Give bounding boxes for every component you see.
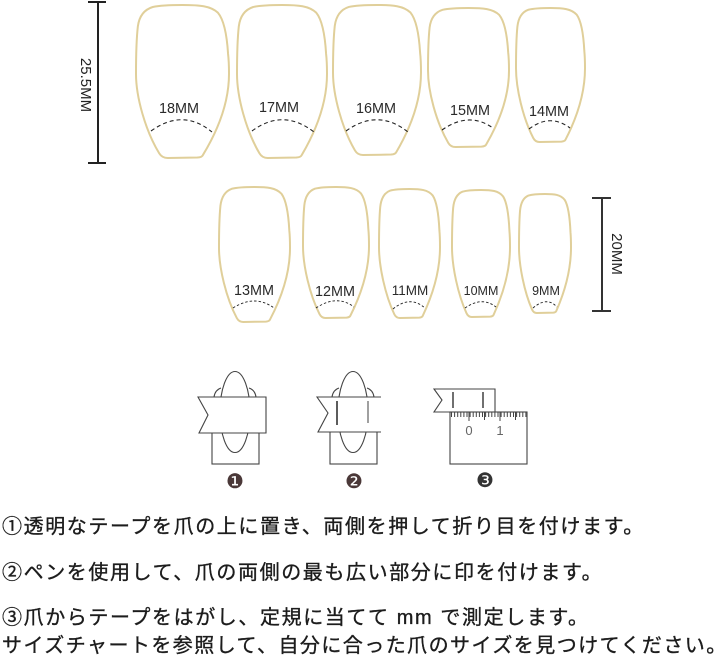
instruction: size chart note: サイズチャートを参照して、自分に合った爪のサイズを見つけてください。 bbox=[2, 634, 720, 657]
nail: 18MM bbox=[136, 5, 229, 158]
instruction: step 1: ①透明なテープを爪の上に置き、両側を押して折り目を付けます。 bbox=[2, 515, 645, 538]
diagram: step 2 mark nail width bbox=[317, 372, 381, 493]
nail: 13MM: 13MM bbox=[234, 283, 274, 299]
nail: 18MM: 18MM bbox=[159, 101, 199, 117]
bracket: 20MM length: 20MM bbox=[608, 233, 625, 275]
nail: 9MM: 9MM bbox=[532, 284, 560, 298]
nail: 15MM: 15MM bbox=[450, 103, 490, 119]
bracket: 20MM length bbox=[592, 198, 625, 311]
instruction: step 2: ②ペンを使用して、爪の両側の最も広い部分に印を付けます。 bbox=[2, 561, 603, 584]
diagram: step 1 tape over nail bbox=[198, 372, 266, 493]
nail: 9MM bbox=[519, 194, 571, 313]
nail: 16MM: 16MM bbox=[356, 101, 396, 117]
nail: 13MM bbox=[219, 187, 290, 322]
nail: 11MM: 11MM bbox=[392, 283, 428, 298]
diagram: step 3 measure with ruler: 0 bbox=[465, 423, 473, 438]
nail: 10MM bbox=[452, 190, 510, 317]
nail: 15MM bbox=[428, 8, 509, 147]
nail: 12MM: 12MM bbox=[315, 284, 355, 300]
nail: 14MM: 14MM bbox=[529, 104, 569, 120]
nail: 11MM bbox=[379, 189, 440, 318]
step number 3: ❸ bbox=[476, 468, 494, 492]
nail: 17MM bbox=[237, 5, 327, 158]
nail: 10MM: 10MM bbox=[464, 284, 498, 298]
instruction: step 3: ③爪からテープをはがし、定規に当てて mm で測定します。 bbox=[2, 606, 590, 629]
diagram: step 3 measure with ruler: 1 bbox=[496, 423, 504, 438]
step number 1: ❶ bbox=[226, 469, 244, 493]
bracket: 25.5MM length bbox=[77, 2, 106, 163]
step number 2: ❷ bbox=[345, 469, 363, 493]
diagram: step 3 measure with ruler bbox=[434, 389, 527, 492]
nail: 17MM: 17MM bbox=[259, 100, 299, 116]
nail: 14MM bbox=[516, 8, 585, 142]
nail: 16MM bbox=[333, 5, 421, 155]
bracket: 25.5MM length: 25.5MM bbox=[77, 58, 94, 112]
nail: 12MM bbox=[303, 187, 369, 318]
